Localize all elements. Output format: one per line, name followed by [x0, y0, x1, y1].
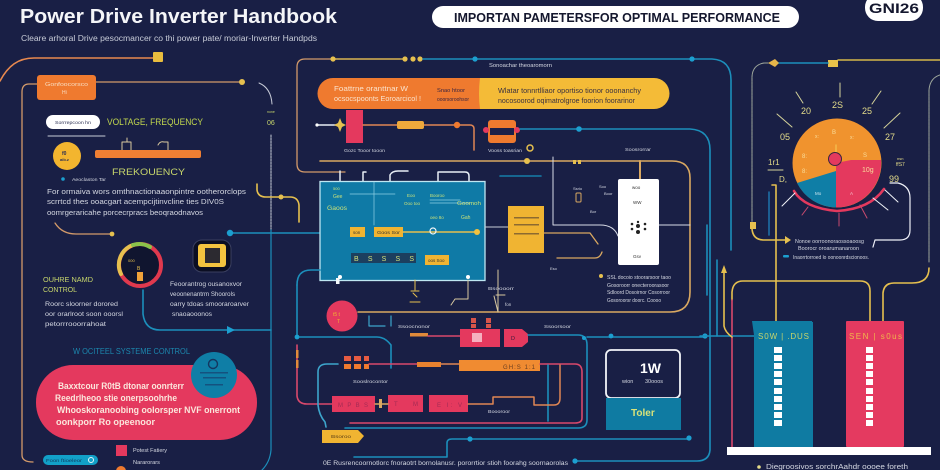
gauge: B	[832, 130, 836, 136]
control text: Roorc sloorner dorored	[45, 301, 118, 308]
blue bus and tan bus	[320, 126, 710, 464]
circuit row one	[315, 110, 474, 153]
footer note: 0E Rusrencoornotlorc fnoraotrt bornolanusr. pororrtior stioh foorahg soornaorolas	[323, 460, 569, 467]
top bus lines	[297, 56, 731, 250]
blue status pill: Foon ftioeleor	[46, 458, 83, 463]
main control panel: son	[353, 230, 361, 235]
right control text: veoonenantrm Shoorols	[170, 291, 236, 298]
main control panel: Booroo	[430, 193, 445, 198]
power chain lower: Boooroor	[488, 409, 511, 414]
yellow pentagon label	[322, 430, 364, 443]
white module: woo	[632, 185, 641, 190]
subtitle: Cleare arhoral Drive pesocmancer co thi power pate/ moriar-Inverter Handpds	[21, 34, 317, 43]
main control panel: Eoo	[407, 193, 416, 198]
left text block	[47, 189, 247, 217]
gauge legend	[783, 239, 869, 261]
gauge labels: 27	[885, 132, 895, 142]
power chain lower	[332, 365, 560, 414]
yellow module	[485, 206, 602, 258]
side text block: Sdloord Dosoirnor Cosorroor	[607, 290, 670, 296]
gauge legend: Inaorrtorroed lo oonoonrdscionoos.	[793, 255, 869, 261]
icon: yellow badge	[53, 142, 81, 170]
red callout: oonkporr Ro opeenoor	[56, 417, 156, 427]
control heading	[43, 277, 93, 294]
banner: Snao htoor	[437, 88, 465, 94]
gauge labels: nsn	[897, 156, 903, 161]
gauge connectors	[700, 59, 940, 447]
banner: ocsocspoonts Eoroarcicol !	[334, 94, 421, 103]
label 06: 06	[267, 120, 275, 127]
white module: WW	[633, 200, 642, 205]
pill label	[46, 115, 100, 129]
banner	[317, 78, 669, 109]
circuit row one: Gozc Tooor tooon	[344, 148, 386, 153]
red callout: Reedrlheoo stie onerpsoohrhe	[55, 393, 177, 403]
legend dot: Aeoclaston Tar	[72, 177, 107, 182]
gauge labels	[768, 100, 905, 184]
power chain top: Ssoocnonor	[398, 324, 431, 329]
gauge labels: 05	[780, 132, 790, 142]
red dial	[326, 300, 358, 332]
main control panel: oeo 8o	[430, 215, 444, 220]
right control text	[170, 281, 250, 318]
main control panel: Gee	[333, 194, 343, 200]
icon: display panel	[193, 240, 231, 272]
gauge ticks	[777, 83, 900, 226]
small readouts: Soo	[599, 184, 607, 189]
main control panel: Gaoos	[327, 206, 347, 212]
main control panel: Gah	[461, 215, 471, 221]
side text block: Gosoroorr onecteroorasoor	[607, 283, 669, 289]
control heading: CONTROL	[43, 287, 77, 294]
bar baseline	[727, 447, 931, 455]
output card: 30ooos	[645, 379, 663, 385]
system control heading: W OCITEEL SYSTEME CONTROL	[73, 347, 191, 356]
badge	[865, 0, 923, 21]
orange bar	[48, 136, 201, 158]
gauge: A	[850, 191, 853, 196]
white module: Gsv	[633, 254, 642, 259]
bar: red: SEN | s0us	[849, 332, 902, 341]
right control text: oarry tdoas smooraroarver	[170, 301, 250, 308]
icon: motor	[483, 120, 523, 153]
legend dot	[61, 177, 107, 182]
gauge legend: Boorocr oroarumanaroon	[798, 246, 859, 252]
lower connectors	[410, 270, 515, 312]
yellow pentagon label: Bsoroo	[331, 434, 352, 439]
voltage heading: VOLTAGE, FREQUENCY	[107, 117, 203, 127]
banner: Foattrne oranttnar W	[334, 84, 409, 93]
output card: Toler	[631, 408, 655, 419]
main control panel	[320, 171, 485, 284]
main control panel: oos Soo	[428, 258, 445, 263]
blue circle badge	[191, 352, 237, 398]
gauge labels: 20	[801, 106, 811, 116]
bottom left legend: Nararorars	[133, 460, 161, 466]
pill label: Sorrrepcoon hn	[55, 120, 92, 125]
side text block	[599, 274, 671, 304]
main control panel: 500	[333, 186, 340, 191]
output card: 1W	[640, 360, 662, 376]
main control panel: B S S S S	[354, 256, 414, 263]
gauge: 8:	[802, 169, 807, 175]
gauge labels: D,	[779, 175, 787, 184]
control text: petorrrooorrahoat	[45, 321, 106, 328]
right control text: snaoaooonos	[172, 311, 213, 318]
gauge labels: 25	[862, 106, 872, 116]
power chain lower: T M	[394, 402, 418, 408]
gauge labels: ffS7	[896, 162, 905, 168]
orange tag: Gonfoocorsco	[45, 82, 88, 88]
red callout: Baxxtcour R0tB dtonar oonrterr	[58, 381, 184, 391]
orange tag	[37, 75, 96, 100]
gauge labels: 2S	[832, 100, 843, 110]
blue return loop	[295, 270, 708, 428]
icon: ring gauge: 000	[128, 258, 135, 263]
icon: yellow badge: f0	[62, 151, 67, 157]
right control text: Feoorantrog ousanoxvor	[170, 281, 243, 288]
lower connectors: fon	[505, 302, 512, 307]
gauge: 8:	[802, 154, 807, 160]
white module	[618, 179, 659, 265]
main control panel: Ooo too	[404, 201, 421, 206]
banner: nocosoorod oqimatrolgroe foorion foorarinor	[498, 96, 635, 105]
icon: ring gauge: B	[137, 266, 141, 272]
side text block: Gosoroorsr doorc. Coooo	[607, 298, 661, 304]
small readouts: Eso	[550, 266, 558, 271]
banner: Wlatar tonnrtlliaor oportiso tionor ooonanchy	[498, 86, 641, 95]
lower connectors: Bsoooorr	[488, 286, 515, 291]
frequency heading: FREKOUENCY	[112, 167, 185, 177]
top bus lines: Sonoachar theoaromorn	[489, 63, 552, 69]
gauge: x:	[815, 134, 819, 140]
small readouts: Bor	[590, 209, 597, 214]
badge: GNI26	[869, 0, 919, 16]
bottom left legend: Potest Fatiery	[133, 448, 168, 454]
left text block: For ormaiva wors omthnactionaaonpintre ootherorclops	[47, 189, 247, 196]
label 06	[267, 110, 275, 127]
left text block: scrrtcd thes ooacgart acempcijtinvcline ties DIV0S	[47, 199, 224, 206]
power chain middle: GH:S 1:1	[503, 365, 536, 371]
main control panel: Goomoh	[457, 201, 481, 207]
control text	[45, 301, 124, 328]
gauge	[792, 118, 884, 211]
power chain middle: Sooslrocontor	[353, 379, 389, 384]
output card: wion	[621, 379, 633, 385]
small readouts: Boor	[604, 191, 613, 196]
power chain top: Ssoorsoor	[544, 324, 572, 329]
red dial: T	[337, 319, 340, 325]
red callout	[36, 365, 257, 440]
side text block: SSL docoio stoorarsoor taoo	[607, 275, 671, 281]
small readouts	[550, 184, 613, 271]
blue status pill	[43, 455, 98, 465]
main control panel: Goos Sor	[377, 230, 401, 235]
icon: motor: Vooss toasrian	[488, 148, 523, 153]
bottom lines	[354, 435, 692, 457]
left text block: oomrgeraricahe porcecrpracs beoqraodnavos	[47, 210, 204, 217]
control text: oor orarlroot soon ooorsl	[45, 311, 124, 318]
header pill	[432, 6, 799, 28]
gauge labels: 1r1	[768, 158, 780, 167]
gauge labels: 99	[889, 174, 899, 184]
header pill: IMPORTAN PAMETERSFOR OPTIMAL PERFORMANCE	[454, 10, 780, 25]
left panel connectors	[0, 52, 320, 470]
title: Power Drive Inverter Handbook	[20, 5, 338, 28]
output card	[606, 350, 681, 430]
icon: yellow badge: aib.z	[60, 157, 69, 162]
power chain top	[369, 316, 572, 347]
banner: ooorsoroohsor	[437, 97, 469, 103]
bottom left legend	[116, 445, 168, 470]
gauge: Mo	[815, 191, 822, 196]
bar: blue: S0W | .DUS	[758, 332, 809, 341]
gauge: 10g	[862, 167, 874, 174]
red dial: t5 t	[333, 312, 341, 318]
label 06: none	[267, 110, 275, 114]
power chain lower: E I: V	[437, 403, 462, 409]
gauge legend: Nonoe oorroonoraossoaoosg	[795, 239, 864, 245]
blue bus and tan bus: Soosrorrar	[625, 147, 652, 152]
power chain top: D	[511, 336, 515, 342]
power chain middle	[344, 356, 582, 423]
orange tag: Hi	[62, 90, 67, 96]
red callout: Whooskoranoobing oolorsper NVF onerront	[57, 405, 240, 415]
bar: blue	[752, 321, 813, 447]
control heading: OUHRE NAMD	[43, 277, 93, 284]
gauge: x:	[850, 135, 854, 141]
small readouts: Ssrio	[573, 186, 583, 191]
bar: red	[846, 321, 904, 447]
power chain lower: M P B S	[338, 403, 368, 409]
gauge: S	[863, 153, 867, 159]
icon: ring gauge	[119, 244, 161, 286]
